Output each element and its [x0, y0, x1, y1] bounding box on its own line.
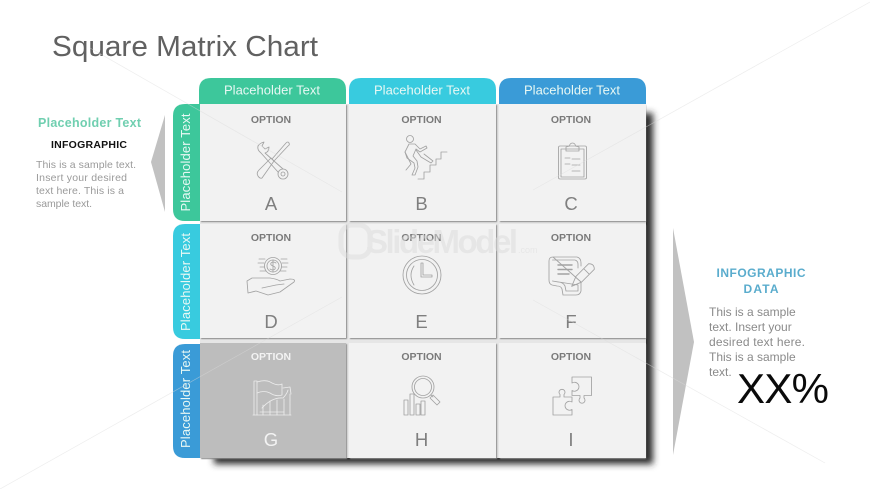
cell G (highlighted)	[200, 343, 346, 458]
row tab: green: Placeholder Text	[178, 113, 193, 212]
right body text: desired text here.	[709, 335, 805, 349]
column header: blue	[499, 78, 646, 104]
left text panel	[36, 116, 142, 210]
icon: person climbing stairs	[405, 136, 447, 179]
cell C: C	[564, 193, 578, 214]
icon: clock	[403, 256, 441, 294]
icon: hand holding coin	[247, 258, 294, 295]
icon: wrench and screwdriver	[257, 142, 289, 179]
cell C	[499, 104, 646, 221]
watermark: .com	[518, 245, 538, 255]
cell F	[499, 224, 646, 338]
watermark: SlideModel	[366, 223, 518, 260]
icon: magnifier over bars	[404, 376, 440, 415]
right body text: This is a sample	[709, 305, 796, 319]
left body text: This is a sample text.	[36, 159, 136, 171]
left body text: sample text.	[36, 198, 92, 210]
cell A: OPTION	[251, 114, 291, 126]
icon: flag and growth chart	[253, 381, 291, 415]
title: Square Matrix Chart	[52, 31, 318, 63]
cell I: I	[568, 429, 574, 450]
cell F: F	[565, 311, 577, 332]
cell D: D	[264, 311, 278, 332]
cell B	[349, 104, 496, 221]
matrix backing	[200, 104, 646, 458]
cell E: OPTION	[401, 232, 442, 244]
icon: puzzle pieces	[553, 377, 592, 415]
right heading: INFOGRAPHIC	[716, 266, 806, 280]
cell D	[200, 224, 346, 338]
cell I	[499, 343, 646, 458]
cell E: E	[415, 311, 428, 332]
right body text: text.	[709, 365, 732, 379]
cell B: B	[415, 193, 428, 214]
row tab: green	[173, 104, 200, 221]
cell F: OPTION	[551, 232, 591, 244]
right text panel	[709, 266, 829, 412]
row tab: blue	[173, 344, 200, 458]
cell A	[200, 104, 346, 221]
right heading: DATA	[744, 282, 779, 296]
matrix	[200, 104, 646, 459]
cell E	[349, 224, 496, 338]
pen	[569, 262, 596, 289]
cell A: A	[265, 193, 278, 214]
left body text: Insert your desired	[36, 172, 127, 184]
column header: cyan	[349, 78, 496, 104]
arrow: left pointer	[151, 115, 165, 212]
column header: green	[199, 78, 346, 104]
cell I: OPTION	[551, 351, 591, 363]
right body text	[709, 305, 805, 379]
cell H	[349, 343, 496, 458]
matrix drop shadow	[214, 113, 653, 464]
right body text: text. Insert your	[709, 320, 792, 334]
cell B: OPTION	[401, 114, 442, 126]
right body text: This is a sample	[709, 350, 796, 364]
icon: clipboard checklist	[558, 143, 586, 179]
cell shadows	[201, 105, 646, 459]
left body text	[36, 159, 136, 210]
cell D: OPTION	[251, 232, 291, 244]
left heading: Placeholder Text	[38, 116, 142, 130]
row tab: blue: Placeholder Text	[178, 350, 193, 448]
right heading	[716, 266, 806, 296]
cell G (highlighted): OPTION	[251, 351, 291, 363]
column header: blue: Placeholder Text	[524, 82, 620, 98]
cell C: OPTION	[551, 114, 591, 126]
cell G (highlighted): G	[264, 429, 278, 450]
row tab: cyan: Placeholder Text	[178, 233, 193, 331]
cell H: H	[415, 429, 428, 450]
row tab: cyan	[173, 224, 200, 339]
arrow: right pointer	[673, 228, 694, 455]
icon: note and pen	[549, 257, 596, 295]
column header: green: Placeholder Text	[224, 82, 320, 98]
left subheading: INFOGRAPHIC	[51, 139, 127, 151]
percentage value: XX%	[737, 365, 829, 412]
column header: cyan: Placeholder Text	[374, 82, 470, 98]
left body text: text here. This is a	[36, 185, 124, 197]
cell H: OPTION	[401, 351, 442, 363]
